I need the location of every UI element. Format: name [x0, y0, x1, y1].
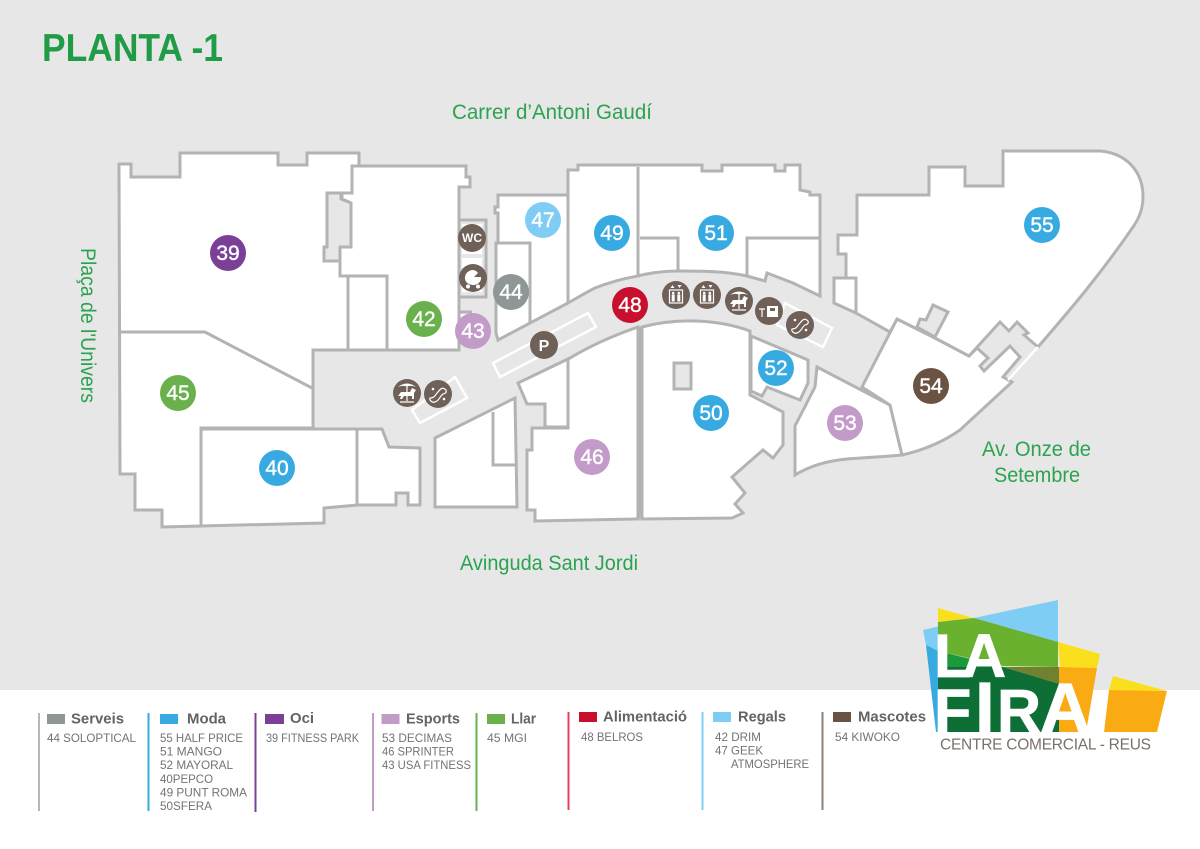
unit 55 side annex: [834, 278, 856, 313]
logo: La Fira: [923, 600, 1167, 754]
marker 47: [525, 202, 561, 238]
legend: Esports: 53 DECIMAS: [382, 731, 452, 745]
legend: Esports: 46 SPRINTER: [382, 744, 454, 758]
legend: Esports: [372, 710, 471, 811]
icon: parking: [530, 331, 558, 359]
marker 49: [594, 215, 630, 251]
marker 53: [827, 405, 863, 441]
marker 51: 51: [704, 222, 728, 245]
legend: Moda: 49 PUNT ROMA: [160, 786, 247, 800]
street label: Av. Onze de Setembre: [982, 438, 1091, 487]
marker 42: 42: [412, 308, 436, 331]
south-west small block: [435, 398, 517, 507]
legend: Alimentació: [568, 708, 687, 810]
marker 47: 47: [531, 209, 555, 232]
marker 53: 53: [833, 412, 857, 435]
street label: Avinguda Sant Jordi: Avinguda Sant Jordi: [460, 552, 638, 575]
marker 52: 52: [764, 357, 788, 380]
street label: Av. Onze de Setembre: Setembre: [994, 464, 1080, 487]
unit 53 block: [795, 367, 902, 475]
marker 52: [758, 350, 794, 386]
legend: Mascotes: 54 KIWOKO: [835, 730, 900, 744]
unit 55 block: [838, 151, 1143, 356]
legend: Oci: Oci: [290, 710, 314, 727]
marker 55: [1024, 207, 1060, 243]
logo wordmark: L: [934, 622, 971, 690]
icon: lift: [662, 281, 690, 309]
unit 42 block: [340, 166, 470, 350]
unit 39 and 45 block: [119, 153, 359, 527]
marker 40: 40: [265, 457, 289, 480]
inner walls west: [120, 276, 387, 388]
icon: carousel: [393, 379, 421, 407]
legend: Esports: 43 USA FITNESS: [382, 758, 471, 772]
marker 48: [612, 287, 648, 323]
logo wordmark: I: [975, 669, 995, 748]
marker 45: 45: [166, 382, 190, 405]
street label: Av. Onze de Setembre: Av. Onze de: [982, 438, 1091, 461]
legend: Moda: Moda: [187, 710, 227, 728]
legend: Moda: 55 HALF PRICE: [160, 731, 243, 745]
unit 52 block: [751, 336, 808, 400]
street label: Plaça de l'Univers: Plaça de l'Univers: [76, 248, 99, 403]
legend: Mascotes: Mascotes: [858, 708, 926, 726]
marker 44: [493, 274, 529, 310]
unit 40 block: [201, 429, 420, 526]
marker 46: [574, 439, 610, 475]
units 49 and 51 block: [568, 165, 820, 303]
column in unit 50: [674, 363, 691, 389]
legend: Serveis: 44 SOLOPTICAL: [47, 731, 136, 745]
legend: Oci: 39 FITNESS PARK: [266, 731, 359, 745]
marker 48: 48: [618, 294, 642, 317]
marker 45: [160, 375, 196, 411]
legend: Oci: [254, 710, 359, 812]
icon: escalator: [786, 311, 814, 339]
logo wordmark: R: [997, 677, 1041, 745]
marker 43: 43: [461, 320, 485, 343]
legend: Alimentació: 48 BELROS: [581, 730, 643, 744]
marker 51: [698, 215, 734, 251]
legend: Llar: [476, 710, 536, 811]
entrance door: [1008, 347, 1038, 380]
icon: WC: WC: [462, 231, 482, 245]
unit 50 block: [642, 321, 783, 519]
escalator pads: [493, 313, 596, 377]
logo wordmark: A: [962, 622, 1006, 690]
marker 44: 44: [499, 281, 523, 304]
logo wordmark: A: [1040, 669, 1091, 747]
logo tagline: CENTRE COMERCIAL - REUS: [940, 736, 1151, 754]
unit 47 and 44 block: [495, 195, 568, 340]
icon: escalator: [424, 380, 452, 408]
marker 46: 46: [580, 446, 604, 469]
title: PLANTA -1: [42, 27, 223, 70]
floor plan: [119, 151, 1143, 527]
icon: lounge: [755, 297, 783, 325]
unit 46 block: [518, 327, 638, 521]
icon: baby stroller: [459, 264, 487, 292]
legend: Regals: [702, 708, 809, 810]
legend: Alimentació: Alimentació: [603, 708, 687, 726]
marker 40: [259, 450, 295, 486]
logo wordmark: F: [934, 677, 971, 745]
legend: Llar: Llar: [511, 710, 536, 728]
legend: Serveis: [38, 710, 136, 811]
legend: Moda: 40PEPCO: [160, 772, 213, 786]
marker 39: 39: [216, 242, 240, 265]
logo shapes: [926, 645, 938, 732]
legend: Regals: 47 GEEK: [715, 744, 763, 758]
legend: Regals: ATMOSPHERE: [731, 757, 809, 771]
legend: Llar: 45 MGI: [487, 731, 527, 745]
unit 54 block: [862, 319, 1020, 455]
icon: lift: [693, 281, 721, 309]
icon: parking: P: [539, 338, 550, 355]
legend: Moda: 52 MAYORAL: [160, 758, 233, 772]
legend: Moda: [148, 710, 247, 813]
marker 50: 50: [699, 402, 723, 425]
legend: Moda: 51 MANGO: [160, 744, 222, 758]
legend: Moda: 50SFERA: [160, 799, 212, 813]
marker 39: [210, 235, 246, 271]
legend: Regals: 42 DRIM: [715, 730, 761, 744]
marker 43: [455, 313, 491, 349]
notch between 39 and 42: [324, 193, 351, 261]
marker 54: 54: [919, 375, 943, 398]
marker 54: [913, 368, 949, 404]
services block: WC and baby room: [459, 220, 486, 330]
legend: Regals: Regals: [738, 708, 786, 726]
central wall: [637, 327, 643, 519]
icon: carousel: [725, 287, 753, 315]
marker 49: 49: [600, 222, 624, 245]
marker 55: 55: [1030, 214, 1054, 237]
icon: WC: [458, 224, 486, 252]
legend: Esports: Esports: [406, 710, 460, 728]
street label: Carrer d'Antoni Gaudí: Carrer d’Antoni Gaudí: [452, 101, 652, 124]
marker 50: [693, 395, 729, 431]
legend: Serveis: Serveis: [71, 710, 124, 728]
stair notch: [917, 305, 948, 337]
legend: Mascotes: [822, 708, 926, 810]
marker 42: [406, 301, 442, 337]
